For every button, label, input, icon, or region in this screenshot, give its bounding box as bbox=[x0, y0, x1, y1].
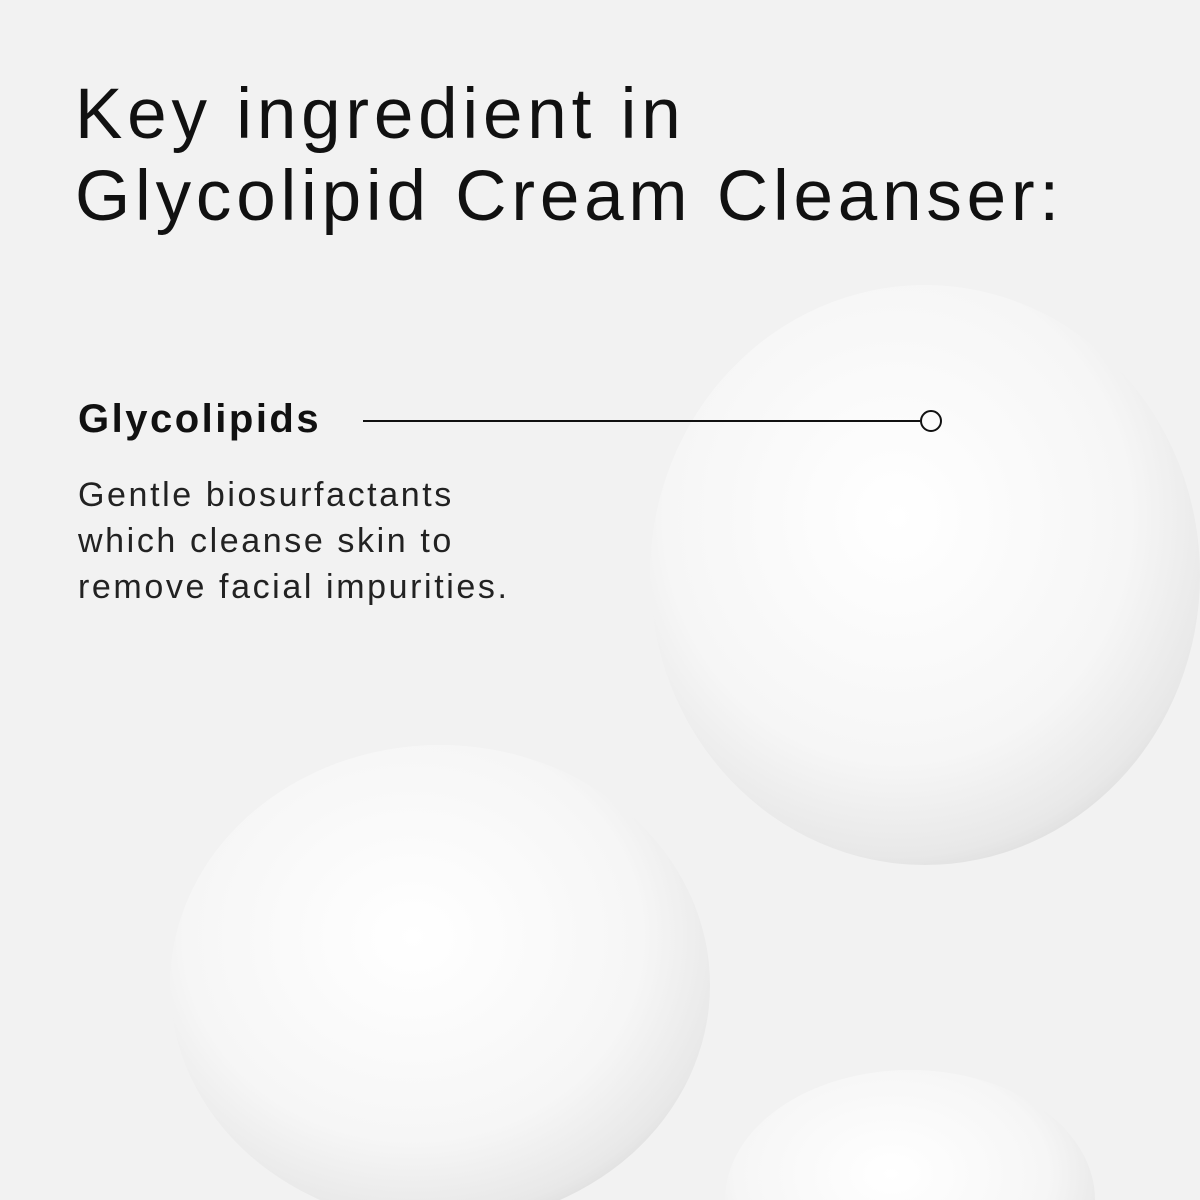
title: Glycolipid Cream Cleanser: bbox=[75, 157, 1064, 236]
heading: Glycolipids: Glycolipids bbox=[78, 397, 321, 441]
blob: bottom right bbox=[806, 1114, 977, 1200]
callout line bbox=[363, 410, 942, 432]
blobs bbox=[288, 383, 1200, 1200]
blob: top right bbox=[770, 383, 1200, 865]
title bbox=[75, 75, 1064, 236]
description: remove facial impurities. bbox=[78, 568, 510, 606]
description: Gentle biosurfactants bbox=[78, 476, 454, 514]
description bbox=[78, 476, 510, 606]
description: which cleanse skin to bbox=[78, 522, 454, 560]
blob: bottom left bbox=[288, 826, 710, 1200]
title: Key ingredient in bbox=[75, 75, 686, 154]
